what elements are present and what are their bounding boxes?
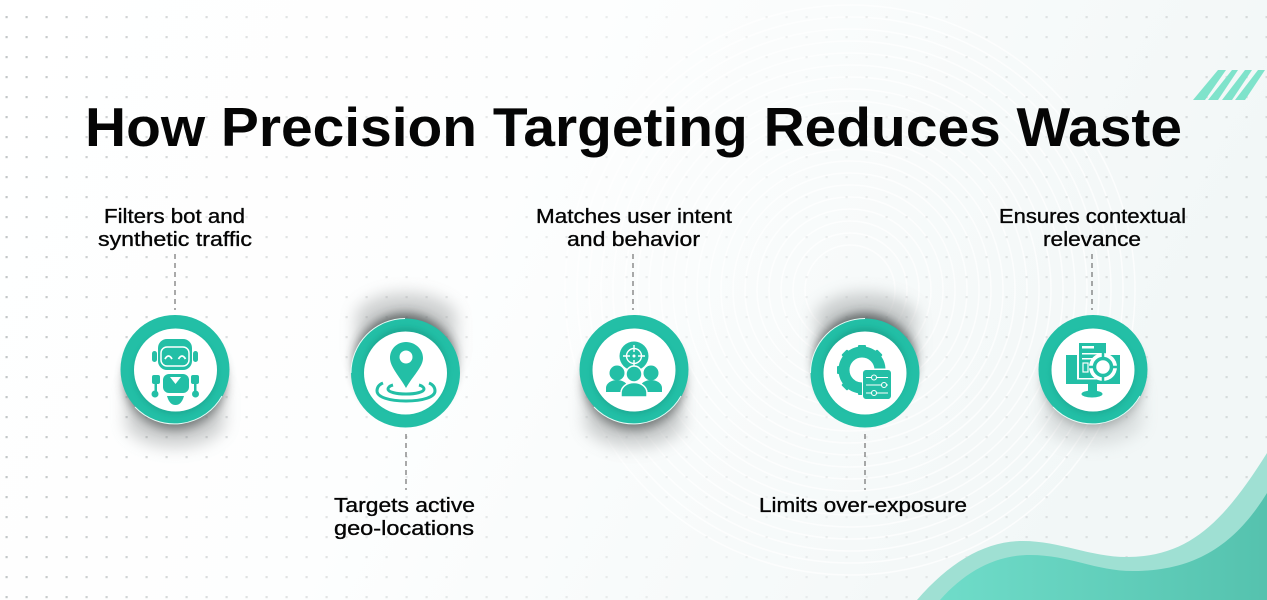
label: user intent: Matches user intent — [536, 206, 732, 228]
title: How Precision Targeting Reduces Waste — [85, 96, 1182, 158]
label: user intent: and behavior — [567, 229, 700, 251]
icon: diagonal stripes — [1193, 70, 1265, 100]
label: geo-locations — [334, 495, 475, 540]
connector — [864, 434, 866, 490]
step 1: filters bot traffic — [98, 206, 252, 447]
label: contextual relevance: relevance — [1043, 229, 1141, 251]
connector — [1091, 254, 1093, 310]
label: contextual relevance — [999, 206, 1186, 251]
icon: monitor with target badge — [1038, 315, 1148, 424]
icon: location pin badge — [351, 318, 460, 428]
icon: robot badge — [120, 315, 230, 424]
connector — [174, 254, 176, 310]
label: filters bot: synthetic traffic — [98, 229, 252, 251]
decorative wave: bottom right — [917, 453, 1267, 600]
label: filters bot — [98, 206, 252, 251]
label: over-exposure: Limits over-exposure — [759, 495, 967, 517]
shadow — [1042, 326, 1144, 445]
step 2: geo-locations — [334, 293, 475, 540]
shadow — [814, 293, 916, 415]
shadow — [583, 328, 685, 447]
icon: gear and sliders badge — [810, 318, 920, 428]
connector — [632, 254, 634, 310]
label: filters bot: Filters bot and — [104, 206, 245, 228]
step 5: contextual relevance — [999, 206, 1186, 445]
shadow — [124, 328, 226, 447]
label: user intent — [536, 206, 732, 251]
label: contextual relevance: Ensures contextual — [999, 206, 1186, 228]
label: geo-locations: Targets active — [334, 495, 475, 517]
connector — [405, 434, 407, 490]
icon: audience target badge — [580, 315, 688, 424]
step 4: over-exposure — [759, 293, 967, 517]
shadow — [354, 293, 456, 415]
step 3: user intent — [536, 206, 732, 447]
label: geo-locations: geo-locations — [334, 518, 474, 540]
